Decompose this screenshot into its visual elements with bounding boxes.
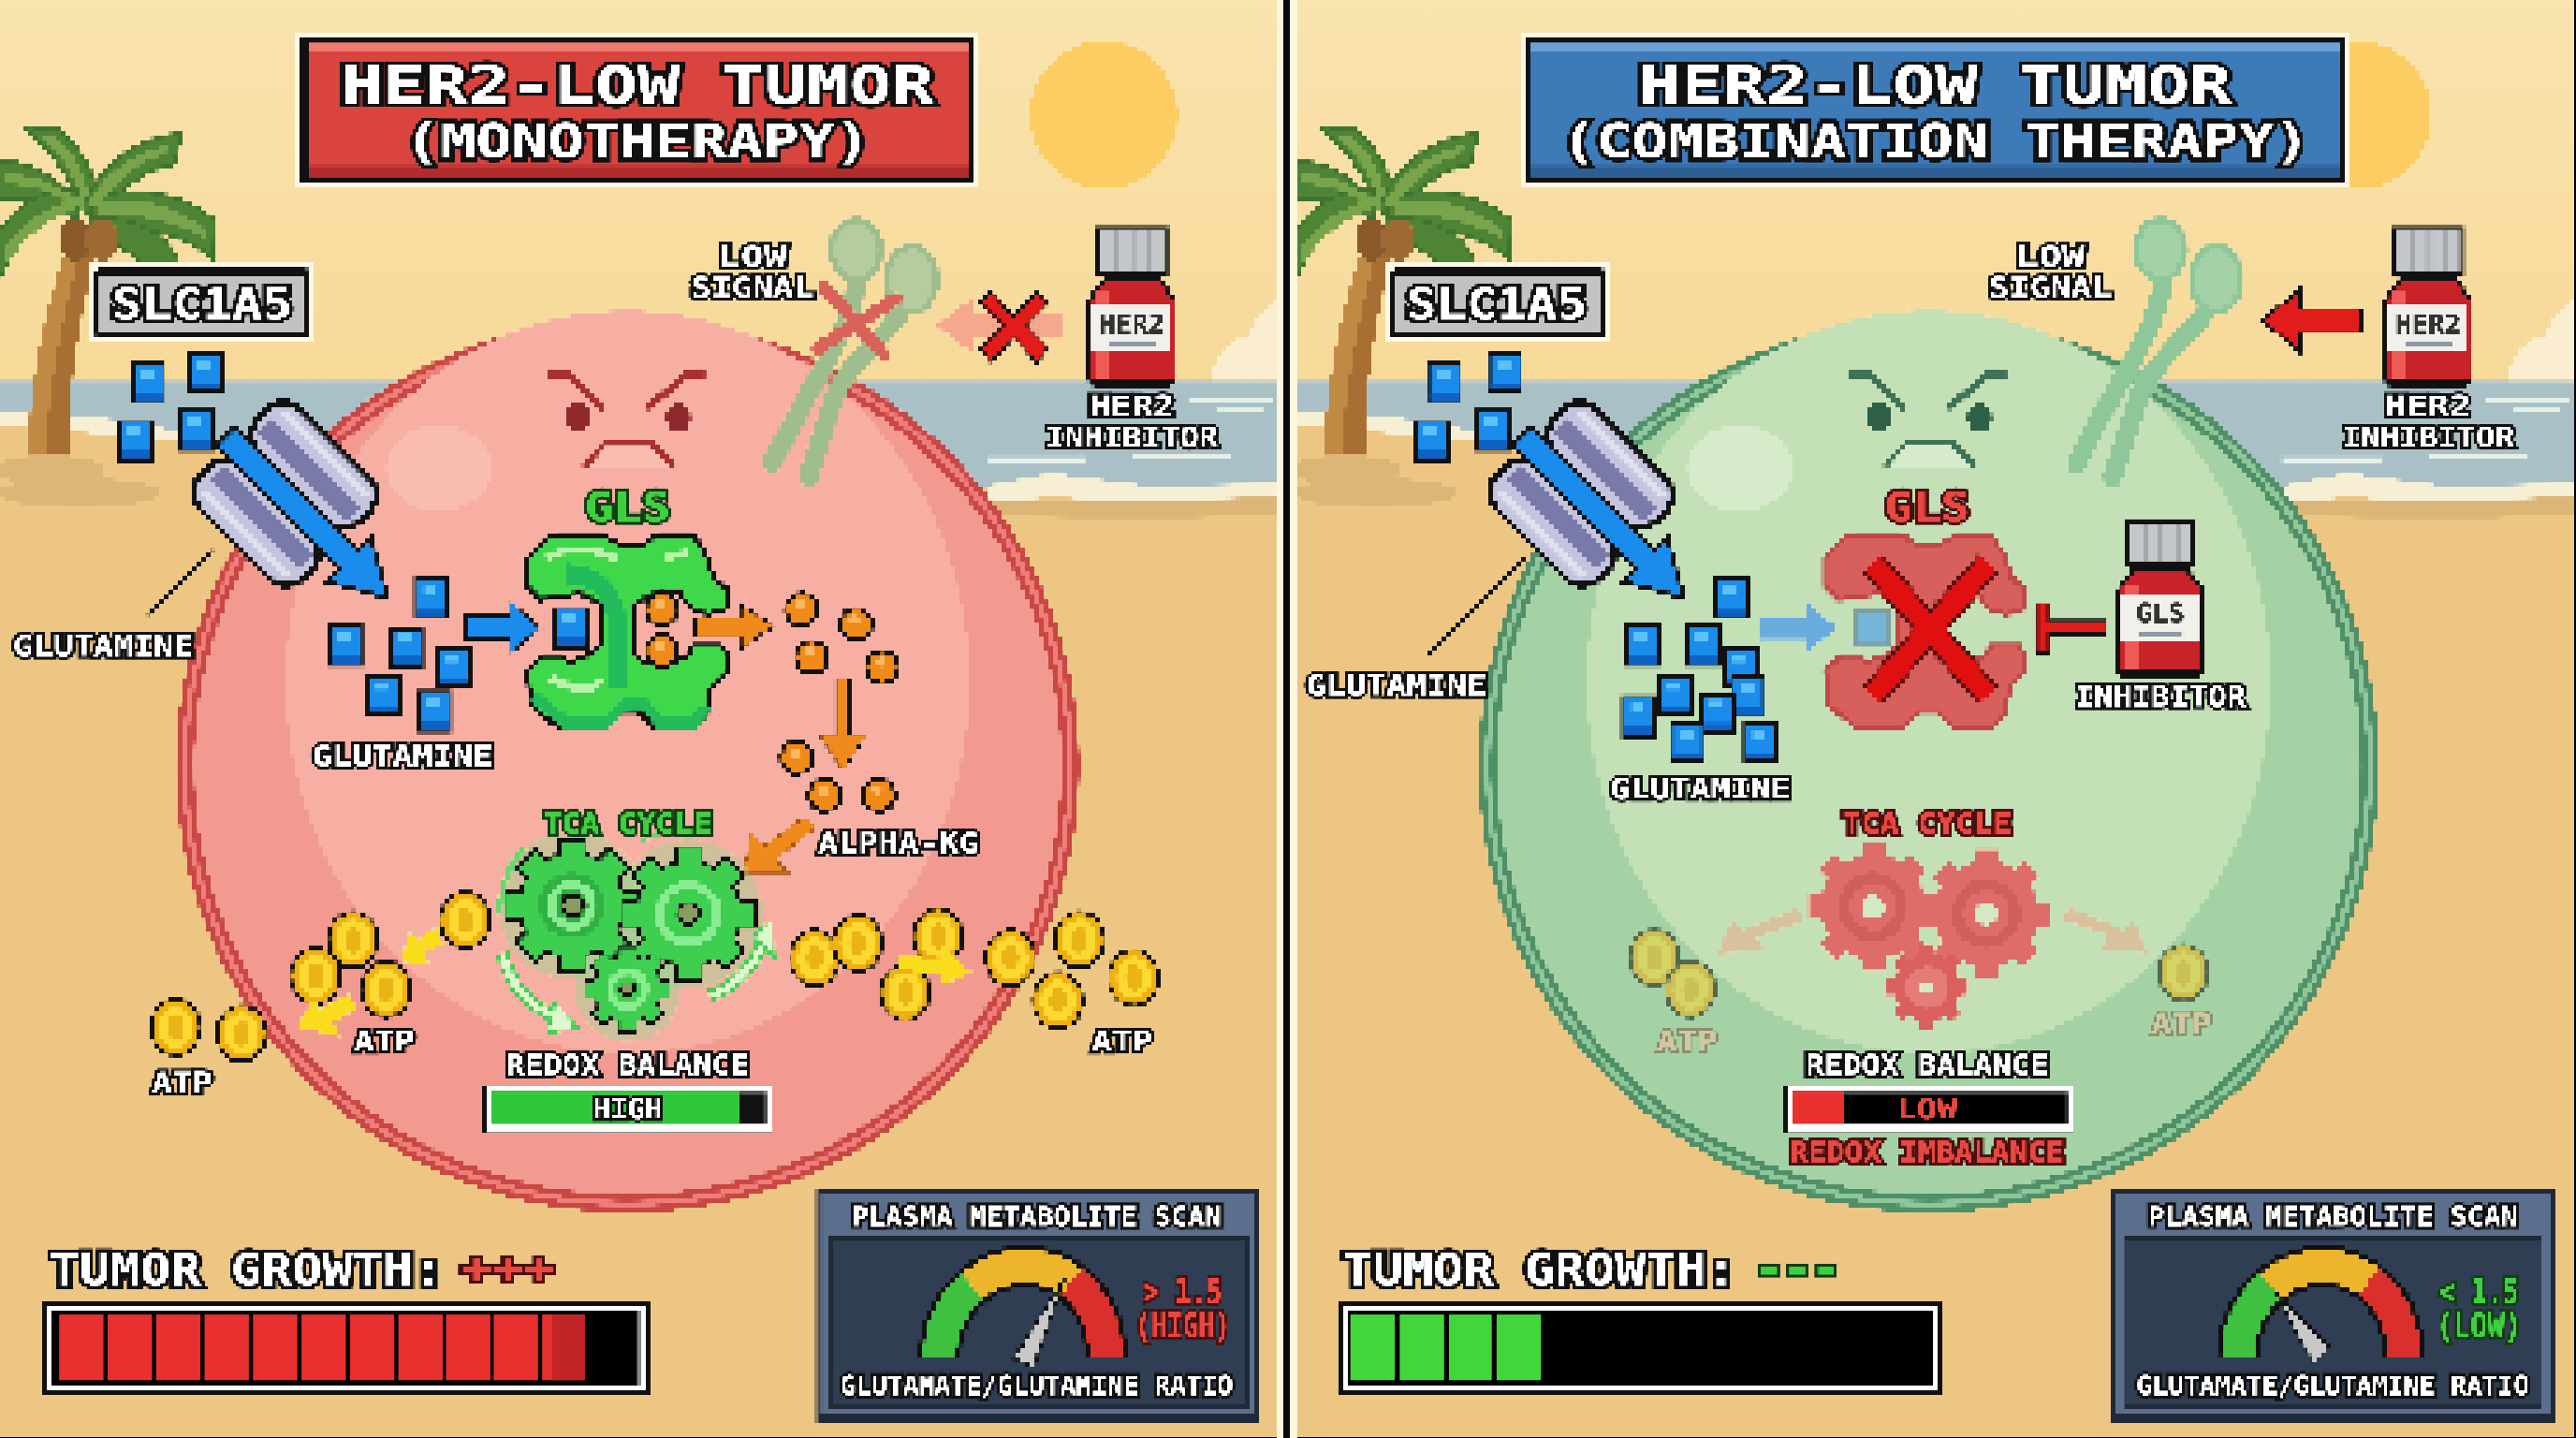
alpha-KG molecules and arrows (695, 592, 900, 873)
label: HER2 inhibitor line 2: INHIBITOR (1046, 421, 1218, 454)
external glutamine squares (117, 352, 224, 462)
label: plasma metabolite scan: PLASMA METABOLITE SCAN (2148, 1201, 2518, 1232)
label: ATP inside left: ATP (354, 1026, 415, 1059)
label: ratio threshold: > 1.5 (1144, 1271, 1222, 1312)
label: growth minus signs: --- (1754, 1244, 1840, 1294)
label: ATP outside left: ATP (152, 1067, 212, 1100)
tumor growth bar frame (1338, 1299, 1943, 1397)
label: redox low: LOW (1896, 1093, 1957, 1126)
icon: HER2 inhibitor bottle (1088, 227, 1177, 388)
TCA cycle gears, active (498, 829, 774, 1042)
label: HER2 inhibitor line 1: HER2 (1090, 390, 1175, 423)
TCA cycle gears, inhibited (1808, 843, 2050, 1029)
title text: HER2-LOW TUMOR (341, 56, 934, 117)
title banner (1519, 31, 2351, 189)
label: alpha-KG: ALPHA-KG (818, 828, 979, 860)
plasma scan panel with gauge (2111, 1188, 2554, 1421)
title text: HER2-LOW TUMOR (1639, 56, 2232, 117)
label: SLC1A5: SLC1A5 (1406, 279, 1587, 329)
label: ratio threshold: < 1.5 (2439, 1271, 2519, 1312)
label: plasma metabolite scan: PLASMA METABOLITE SCAN (852, 1201, 1222, 1232)
label: low signal line 2: SIGNAL (1989, 272, 2112, 305)
beach background (1295, 0, 2576, 1438)
panel: combination therapy tumor (1290, 0, 2576, 1438)
label: ATP right: ATP (1091, 1026, 1152, 1059)
angry face (547, 374, 705, 466)
SLC1A5 transporter with arrow (148, 389, 390, 616)
SLC1A5 badge (91, 263, 314, 344)
label: bottle HER2: HER2 (1099, 309, 1164, 340)
tumor growth bar segments: high (59, 1314, 585, 1380)
title banner (296, 31, 979, 189)
label: inhibitor: INHIBITOR (2075, 682, 2246, 714)
label: bottle HER2: HER2 (2395, 309, 2461, 340)
icon: palm tree (0, 126, 215, 507)
GLS enzyme, active (527, 534, 728, 728)
beach background (0, 0, 1296, 1438)
labels layer: combination (1306, 56, 2529, 1401)
title subtitle: (COMBINATION THERAPY) (1560, 114, 2310, 169)
label: external glutamine: GLUTAMINE (13, 630, 194, 663)
label: ATP right, faded: ATP (2151, 1008, 2212, 1041)
label: redox balance: REDOX BALANCE (1806, 1049, 2049, 1082)
label: low signal line 1: LOW (2016, 241, 2085, 273)
center divider (1277, 0, 1297, 1438)
tumor growth bar segments: low (1351, 1314, 1541, 1380)
panel: monotherapy tumor (0, 0, 1296, 1438)
label: low signal line 2: SIGNAL (691, 272, 814, 305)
label: internal glutamine: GLUTAMINE (1610, 773, 1791, 806)
label: TCA cycle: TCA CYCLE (1842, 808, 2012, 841)
SLC1A5 badge (1386, 263, 1610, 344)
title subtitle: (MONOTHERAPY) (404, 114, 871, 169)
label: internal glutamine: GLUTAMINE (312, 741, 493, 773)
arrow: faded glutamine into GLS (1761, 601, 1888, 654)
label: SLC1A5: SLC1A5 (111, 279, 292, 329)
label: low signal line 1: LOW (718, 241, 787, 273)
label: GLS: GLS (585, 483, 670, 531)
label: HER2 inhibitor line 1: HER2 (2385, 390, 2471, 423)
HER2 receptor, green (2076, 220, 2241, 477)
label: ATP left, faded: ATP (1657, 1026, 1718, 1059)
GLS enzyme, inhibited (1825, 534, 2026, 728)
label: HER2 inhibitor line 2: INHIBITOR (2342, 421, 2514, 454)
arrow: glutamine into GLS (465, 601, 540, 654)
SLC1A5 transporter with arrow (1426, 389, 1687, 657)
icon: HER2 inhibitor bottle (2384, 227, 2472, 388)
labels layer: monotherapy (13, 56, 1233, 1401)
label: GLS: GLS (1884, 483, 1969, 531)
label: ratio low: (LOW) (2437, 1306, 2522, 1346)
treated tumor cell body (1479, 311, 2378, 1212)
label: tumor growth: TUMOR GROWTH: (1342, 1244, 1736, 1296)
label: redox high: HIGH (593, 1093, 662, 1126)
tumor growth bar frame (43, 1299, 649, 1397)
ATP coins, right group (788, 907, 1160, 1030)
external glutamine squares (1414, 352, 1523, 462)
pixel art layer: monotherapy (0, 0, 1296, 1438)
ATP coins, left group (150, 890, 491, 1064)
tumor cell body (176, 311, 1079, 1212)
faded ATP arrows and coins (1628, 907, 2210, 1019)
arrow: HER2 inhibitor red arrow (2262, 289, 2361, 352)
icon: palm tree (1290, 126, 1512, 507)
label: tumor growth: TUMOR GROWTH: (50, 1244, 444, 1296)
pixel art layer: combination (1290, 0, 2576, 1438)
angry face (1848, 374, 2006, 466)
HER2 receptor, faded with red cross (772, 220, 936, 477)
redox balance bar: high (483, 1084, 774, 1134)
redox balance bar: low (1784, 1084, 2075, 1134)
internal glutamine squares (1621, 577, 1779, 764)
label: glutamate glutamine ratio: GLUTAMATE/GLUTAMINE RATIO (2137, 1371, 2529, 1401)
label: external glutamine: GLUTAMINE (1306, 669, 1486, 702)
label: redox balance: REDOX BALANCE (506, 1049, 749, 1082)
label: redox imbalance: REDOX IMBALANCE (1790, 1137, 2064, 1169)
label: glutamate glutamine ratio: GLUTAMATE/GLUTAMINE RATIO (841, 1371, 1233, 1401)
plasma scan panel with gauge (816, 1188, 1260, 1421)
label: GLS bottle: GLS (2136, 598, 2185, 629)
label: growth plus signs: +++ (461, 1244, 554, 1294)
label: TCA cycle: TCA CYCLE (543, 808, 712, 841)
label: ratio high: (HIGH) (1135, 1306, 1231, 1346)
internal glutamine squares (327, 577, 472, 733)
arrow: blocked faded arrow with red X (936, 291, 1064, 361)
GLS inhibitor bottle with T-bar (2037, 518, 2204, 679)
